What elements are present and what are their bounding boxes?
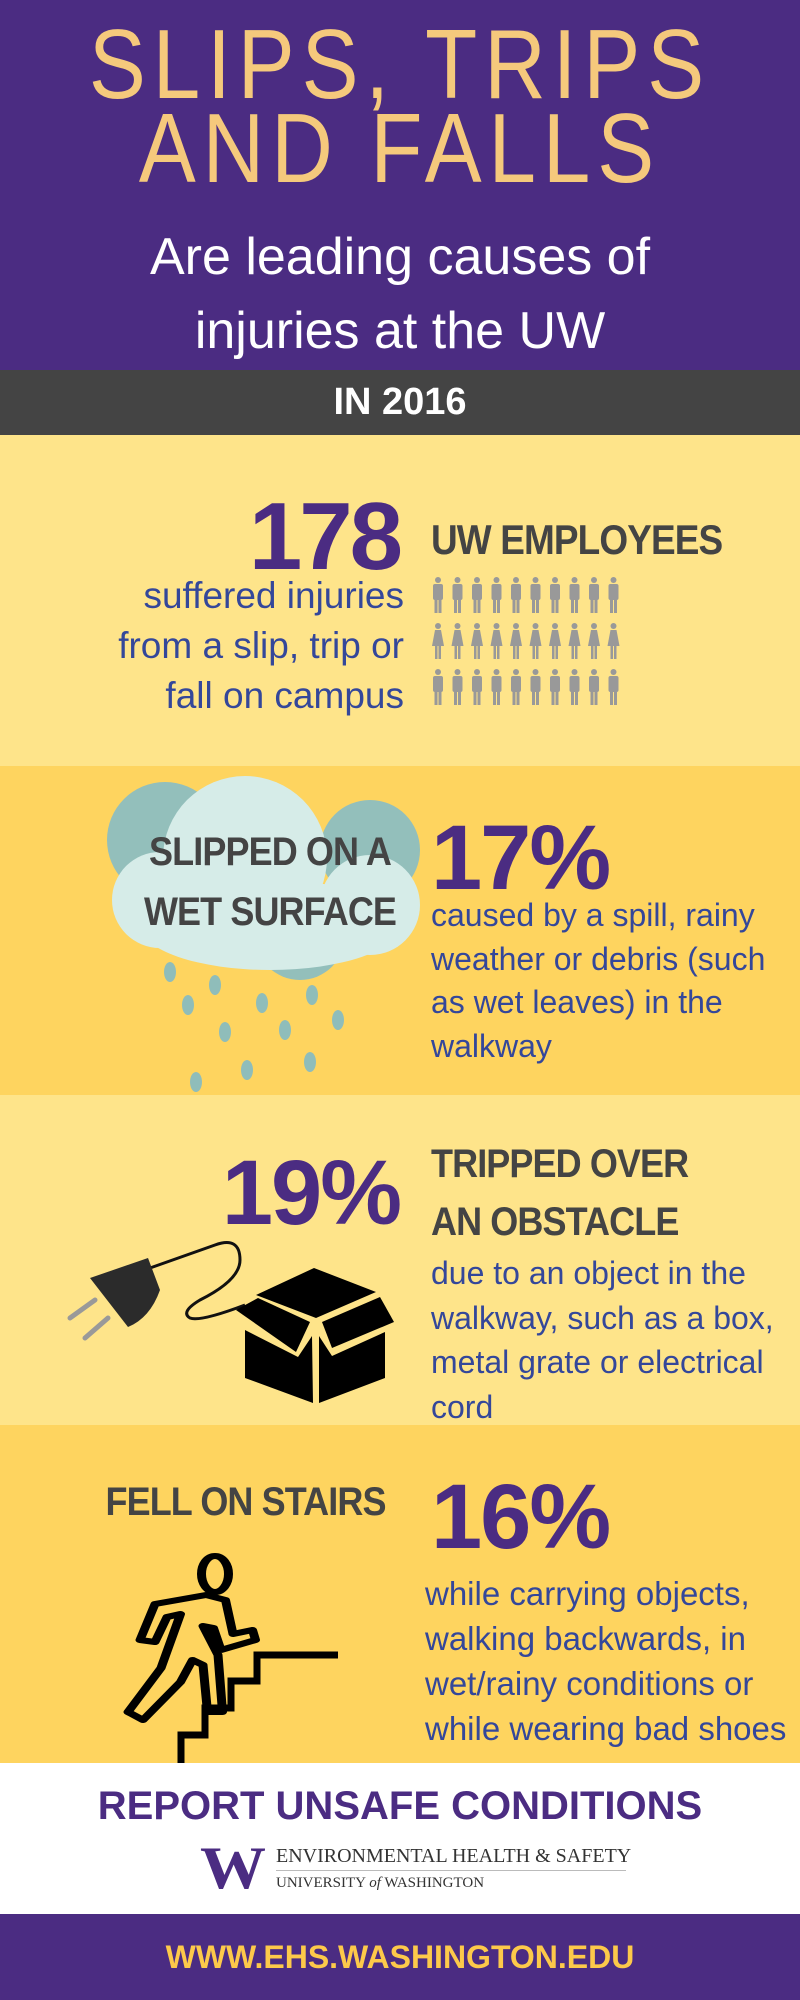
heading: slipped on a wet surface: [144, 830, 396, 934]
text: cause description: weather or debris (such: [431, 940, 765, 976]
text: suffered injuries: from a slip, trip or: [118, 625, 404, 666]
heading: tripped over an obstacle: TRIPPED OVER: [431, 1142, 688, 1186]
icon grid: people: [432, 577, 620, 705]
text: university of washington: UNIVERSITY of WASHINGTON: [276, 1875, 484, 1891]
text: obstacle description: metal grate or electrical: [431, 1344, 764, 1380]
text: stairs description: walking backwards, in: [425, 1620, 746, 1657]
panel: fell on stairs: [0, 1425, 800, 1763]
heading: UW employees: UW EMPLOYEES: [431, 516, 722, 563]
text: obstacle description: [431, 1255, 774, 1424]
icon: person climbing stairs: [124, 1553, 338, 1763]
icon: plug and box: [68, 1241, 394, 1403]
big number 17%: 17%: [431, 807, 609, 909]
heading: tripped over an obstacle: AN OBSTACLE: [431, 1200, 678, 1244]
text: stairs description: while wearing bad shoes: [425, 1710, 786, 1747]
title: AND FALLS: [139, 93, 661, 203]
text: obstacle description: walkway, such as a box,: [431, 1300, 774, 1336]
big number 19%: 19%: [222, 1142, 400, 1244]
panel: slipped on wet surface: [0, 766, 800, 1095]
footer: website: [0, 1914, 800, 2000]
subtitle: [150, 228, 650, 360]
panel: report unsafe conditions: [0, 1763, 800, 1914]
text: cause description: [431, 897, 765, 1064]
icon: rain cloud: [107, 776, 420, 1092]
subtitle: Are leading causes of: [150, 228, 650, 286]
header panel: [0, 0, 800, 370]
year bar: IN 2016: [333, 381, 467, 423]
title: [89, 9, 711, 203]
text: obstacle description: cord: [431, 1388, 493, 1424]
heading: tripped over an obstacle: [431, 1142, 688, 1244]
text: EHS name: ENVIRONMENTAL HEALTH & SAFETY: [276, 1845, 631, 1867]
panel: 178 employees: [0, 435, 800, 766]
text: suffered injuries: suffered injuries: [143, 575, 404, 616]
panel: tripped over obstacle: [0, 1095, 800, 1425]
text: cause description: as wet leaves) in the: [431, 984, 723, 1020]
text: stairs description: wet/rainy conditions or: [425, 1665, 753, 1702]
text: stairs description: [425, 1575, 786, 1747]
text: suffered injuries: [118, 575, 404, 716]
big number 178: 178: [249, 483, 400, 590]
logo: UW EHS: [200, 1835, 631, 1901]
footer: website: WWW.EHS.WASHINGTON.EDU: [166, 1939, 634, 1975]
heading: report unsafe conditions: REPORT UNSAFE CONDITIONS: [98, 1784, 702, 1828]
text: suffered injuries: fall on campus: [165, 675, 404, 716]
subtitle: injuries at the UW: [195, 302, 605, 360]
title: SLIPS, TRIPS: [89, 9, 711, 119]
text: cause description: walkway: [431, 1028, 552, 1064]
big number 16%: 16%: [431, 1466, 609, 1568]
heading: slipped on a wet surface: SLIPPED ON A: [149, 830, 391, 874]
icon: W: W: [200, 1835, 266, 1901]
text: stairs description: while carrying objects,: [425, 1575, 750, 1612]
heading: slipped on a wet surface: WET SURFACE: [144, 890, 396, 934]
text: obstacle description: due to an object in the: [431, 1255, 746, 1291]
heading: fell on stairs: FELL ON STAIRS: [106, 1480, 386, 1524]
text: cause description: caused by a spill, rainy: [431, 897, 755, 933]
year bar: [0, 370, 800, 435]
